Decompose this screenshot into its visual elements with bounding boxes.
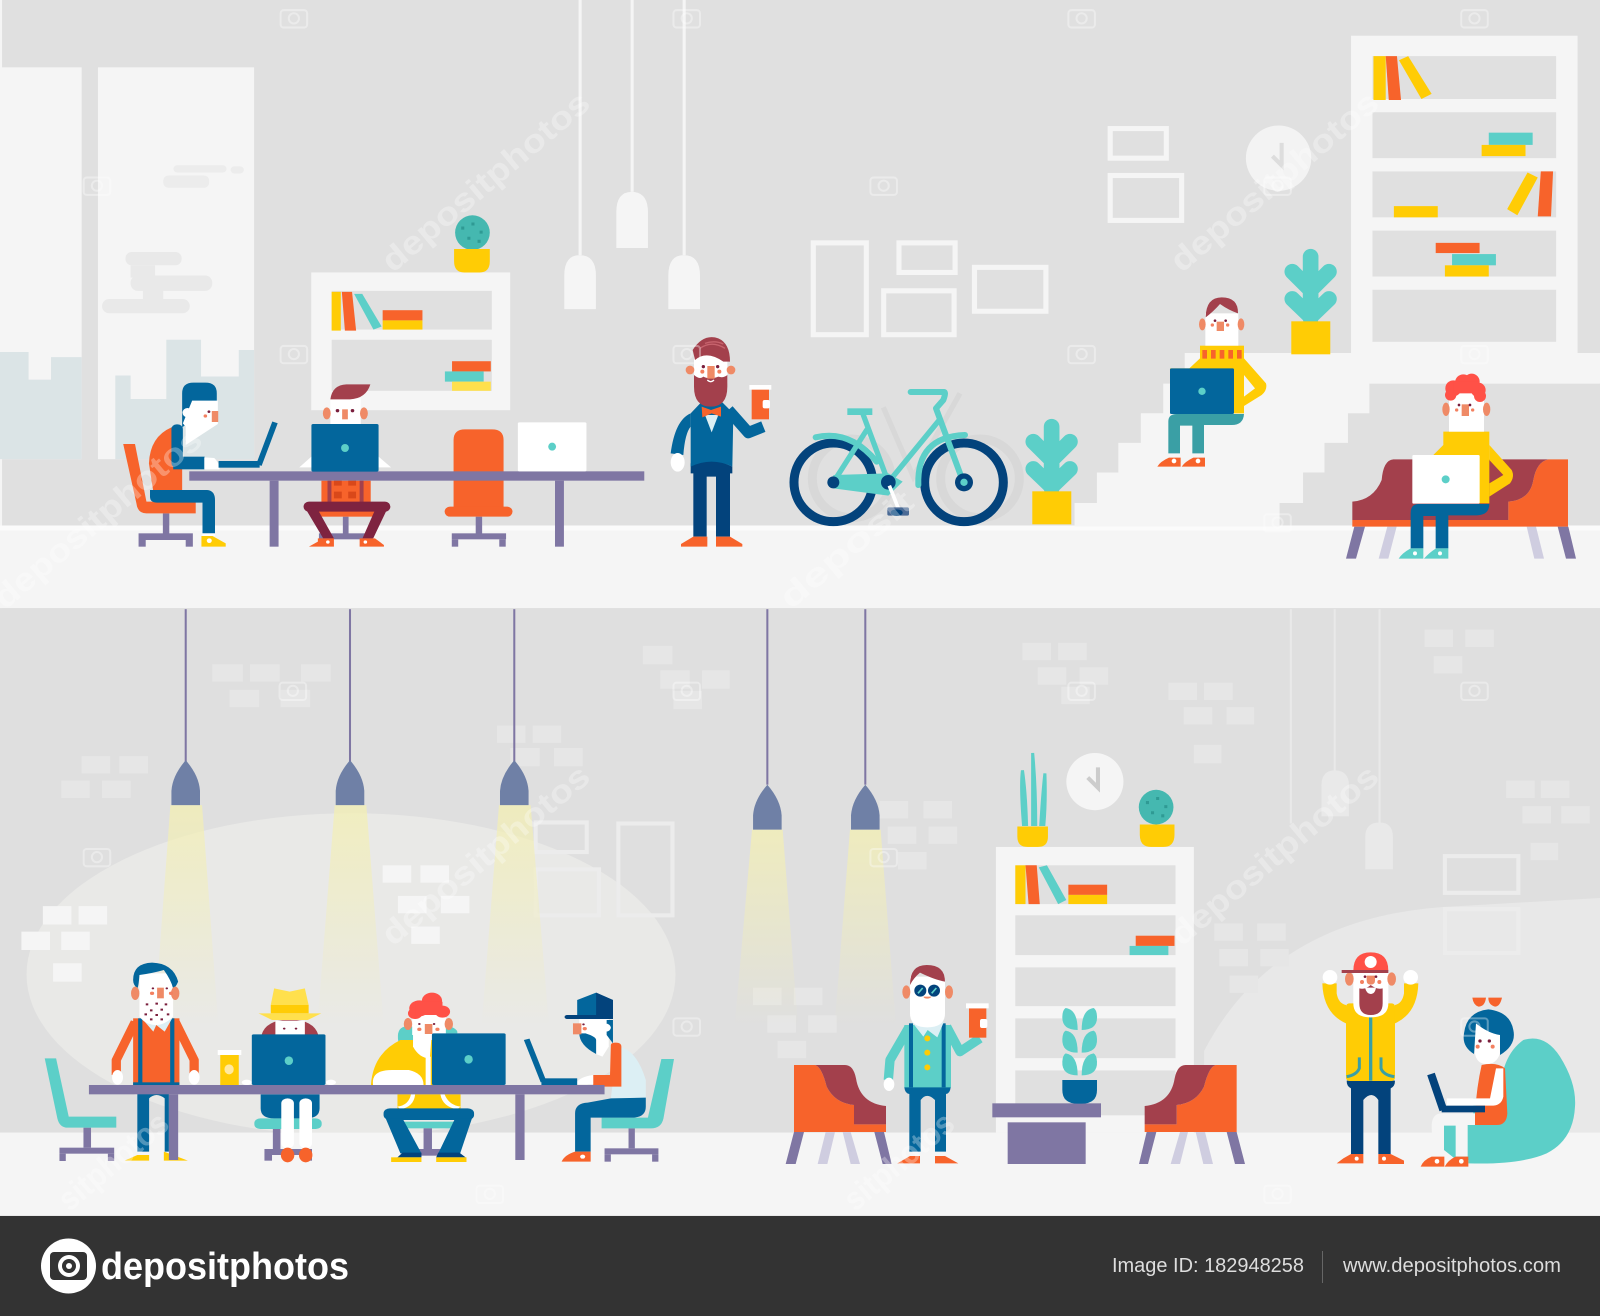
hanging pendant lamps upper xyxy=(564,0,700,309)
lower bookcase xyxy=(996,847,1194,1133)
person: woman in yellow hat upper body xyxy=(242,988,336,1085)
person: front with plaid shirt xyxy=(299,384,391,547)
potted reeds plant xyxy=(1017,753,1048,847)
lounge people: lower right xyxy=(1322,952,1575,1167)
logo: camera badge xyxy=(41,1238,96,1294)
coffee cup on desk xyxy=(218,1050,241,1085)
person: girl with laptop on bean bag xyxy=(1421,998,1514,1167)
watermark text xyxy=(0,83,1385,1218)
person: side working at laptop xyxy=(149,383,226,547)
watermark text: depositphotos xyxy=(374,83,597,279)
faint lower picture frames xyxy=(536,822,1518,953)
hanging ceiling lamps xyxy=(171,609,880,830)
team desk scene: lower left xyxy=(45,963,674,1162)
wall picture frames xyxy=(813,129,1182,335)
laptop: side view on team desk xyxy=(527,1039,577,1085)
potted cactus on shelf xyxy=(454,215,490,272)
watermark camera marks xyxy=(84,10,1488,1203)
watermark text: deposit xyxy=(772,482,921,616)
faint pendants lower right xyxy=(1290,609,1393,869)
stairs people xyxy=(1157,297,1576,559)
person: sitting on sofa with laptop xyxy=(1399,374,1513,559)
upper room wall decor xyxy=(0,0,1600,527)
laptop: red-hair person's xyxy=(432,1033,506,1085)
chair: side person xyxy=(123,444,196,547)
watermark text: depositphotos xyxy=(374,757,597,952)
sofa xyxy=(1346,459,1576,559)
lounge scene xyxy=(786,965,1245,1164)
long desk xyxy=(189,471,644,547)
person: red hair upper body xyxy=(371,993,457,1085)
person: woman in yellow hat lower body and chair xyxy=(254,1094,322,1162)
big bookcase xyxy=(1351,36,1578,354)
footer bar xyxy=(0,1216,1600,1316)
window with skyline xyxy=(0,67,254,459)
potted cactus on lower bookcase xyxy=(1139,790,1174,847)
lower room wall decor xyxy=(0,609,1600,1215)
plant by the stairs xyxy=(1032,427,1071,524)
person: sitting on stairs with laptop xyxy=(1157,297,1266,467)
lower wall clock xyxy=(1066,753,1123,810)
man in blue suit with coffee xyxy=(671,337,771,547)
coffee table xyxy=(992,1103,1101,1164)
hipster with coffee and bicycle xyxy=(671,337,1019,547)
faint wall bricks xyxy=(61,630,1590,1058)
plant on the landing xyxy=(1291,257,1330,354)
teal chair left xyxy=(45,1058,116,1161)
small bookshelf xyxy=(311,272,510,410)
bean bag xyxy=(1444,1039,1575,1164)
potted leaf plant on table xyxy=(1062,1008,1097,1104)
wall clock upper xyxy=(1246,126,1311,191)
bicycle with shadow xyxy=(794,392,1019,522)
person: cap and beard with chair xyxy=(562,993,674,1162)
armchair left xyxy=(786,1065,892,1164)
desk scene: upper left xyxy=(123,383,644,547)
chair: empty orange xyxy=(445,429,512,547)
person: red cap man with arms raised xyxy=(1322,952,1418,1164)
person: red hair in yellow jacket lower body xyxy=(384,1094,474,1162)
laptop: side view xyxy=(219,422,275,468)
person: standing with suspenders xyxy=(112,963,200,1161)
laptop: woman's xyxy=(252,1034,325,1085)
stairs and landing xyxy=(1074,353,1600,527)
armchair right xyxy=(1139,1065,1245,1164)
logo wordmark: depositphotos xyxy=(101,1246,349,1288)
watermark text: sitphotos xyxy=(50,1104,176,1218)
laptop: white on desk xyxy=(518,422,586,471)
spotlight oval xyxy=(27,813,676,1136)
image id: Image ID: 182948258 xyxy=(1112,1255,1304,1277)
white bricks in spotlight xyxy=(21,865,469,982)
watermark text: depositphotos xyxy=(1162,83,1385,279)
light cones xyxy=(154,805,896,1026)
team desk xyxy=(89,1085,605,1160)
laptop: blue on desk xyxy=(311,424,379,472)
person: sunglasses and white beard with coffee xyxy=(884,965,989,1163)
watermark text: sitphotos xyxy=(836,1104,961,1218)
right background curve xyxy=(1204,898,1600,1133)
watermark text: depositphotos xyxy=(1162,757,1385,952)
website url: www.depositphotos.com xyxy=(1342,1255,1561,1277)
